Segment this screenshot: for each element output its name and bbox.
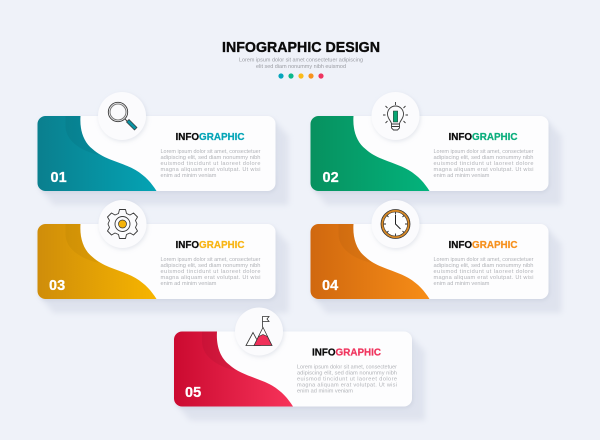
subtitle: [239, 58, 363, 70]
body text: enim ad minim veniam: [160, 173, 217, 179]
colour panel: [310, 224, 430, 299]
subtitle: Lorem ipsum dolor sit amet consectetuer adipiscing: [239, 58, 363, 64]
number: 01: [50, 170, 67, 186]
body text: adipiscing elit, sed diam nonummy nibh: [160, 263, 260, 269]
body text: Lorem ipsum dolor sit amet, consectetuer: [297, 364, 397, 370]
body text: euismod tincidunt ut laoreet dolore: [434, 269, 534, 275]
body text: magna aliquam erat volutpat. Ut wisi: [297, 382, 397, 388]
body text: adipiscing elit, sed diam nonummy nibh: [434, 263, 534, 269]
number: 03: [49, 278, 65, 294]
body text: magna aliquam erat volutpat. Ut wisi: [160, 275, 260, 281]
icon circle: [372, 92, 420, 140]
body text: enim ad minim veniam: [434, 173, 490, 179]
body text: euismod tincidunt ut laoreet dolore: [297, 376, 397, 382]
colour panel: [310, 116, 430, 191]
icon circle: [98, 92, 146, 140]
body text: magna aliquam erat volutpat. Ut wisi: [160, 167, 260, 173]
body text: magna aliquam erat volutpat. Ut wisi: [434, 167, 534, 173]
heading: INFOGRAPHIC: [176, 131, 245, 143]
icon circle: [235, 308, 283, 356]
body text: euismod tincidunt ut laoreet dolore: [160, 269, 260, 275]
title: INFOGRAPHIC DESIGN: [222, 40, 380, 56]
card 01: [38, 92, 288, 205]
body text: adipiscing elit, sed diam nonummy nibh: [160, 155, 260, 161]
icon: mountain flag: [246, 316, 272, 346]
icon: clock: [381, 210, 410, 238]
number: 04: [322, 278, 338, 294]
body text: magna aliquam erat volutpat. Ut wisi: [434, 275, 534, 281]
body text: Lorem ipsum dolor sit amet, consectetuer: [434, 257, 534, 263]
colour dots: [278, 73, 324, 79]
body text: Lorem ipsum dolor sit amet, consectetuer: [160, 149, 261, 155]
heading: INFOGRAPHIC: [448, 239, 518, 251]
body text: adipiscing elit, sed diam nonummy nibh: [434, 155, 534, 161]
body text: euismod tincidunt ut laoreet dolore: [434, 161, 534, 167]
body text: euismod tincidunt ut laoreet dolore: [160, 161, 260, 167]
body text: enim ad minim veniam: [434, 281, 490, 287]
card 05: [174, 308, 425, 420]
body text: [160, 149, 261, 179]
icon: magnifier: [108, 102, 137, 130]
card 03: [38, 200, 288, 313]
body text: [297, 364, 397, 394]
card 02: [310, 92, 562, 205]
heading: INFOGRAPHIC: [312, 346, 381, 358]
subtitle: elit sed diam nonummy nibh euismod: [256, 64, 346, 70]
icon: light bulb: [383, 102, 408, 130]
heading: INFOGRAPHIC: [448, 131, 518, 143]
body text: [434, 257, 534, 287]
icon circle: [98, 200, 146, 248]
number: 05: [185, 385, 201, 401]
heading: INFOGRAPHIC: [176, 239, 245, 251]
card 04: [310, 200, 562, 313]
body text: enim ad minim veniam: [297, 388, 353, 394]
body text: Lorem ipsum dolor sit amet, consectetuer: [160, 257, 261, 263]
body text: enim ad minim veniam: [160, 281, 217, 287]
body text: [160, 257, 261, 287]
colour panel: [38, 116, 156, 191]
body text: [434, 149, 534, 179]
colour panel: [174, 332, 293, 406]
body text: Lorem ipsum dolor sit amet, consectetuer: [434, 149, 534, 155]
body text: adipiscing elit, sed diam nonummy nibh: [297, 370, 397, 376]
colour panel: [38, 224, 156, 299]
icon circle: [372, 200, 420, 248]
icon: gear: [108, 210, 138, 238]
number: 02: [322, 170, 339, 186]
